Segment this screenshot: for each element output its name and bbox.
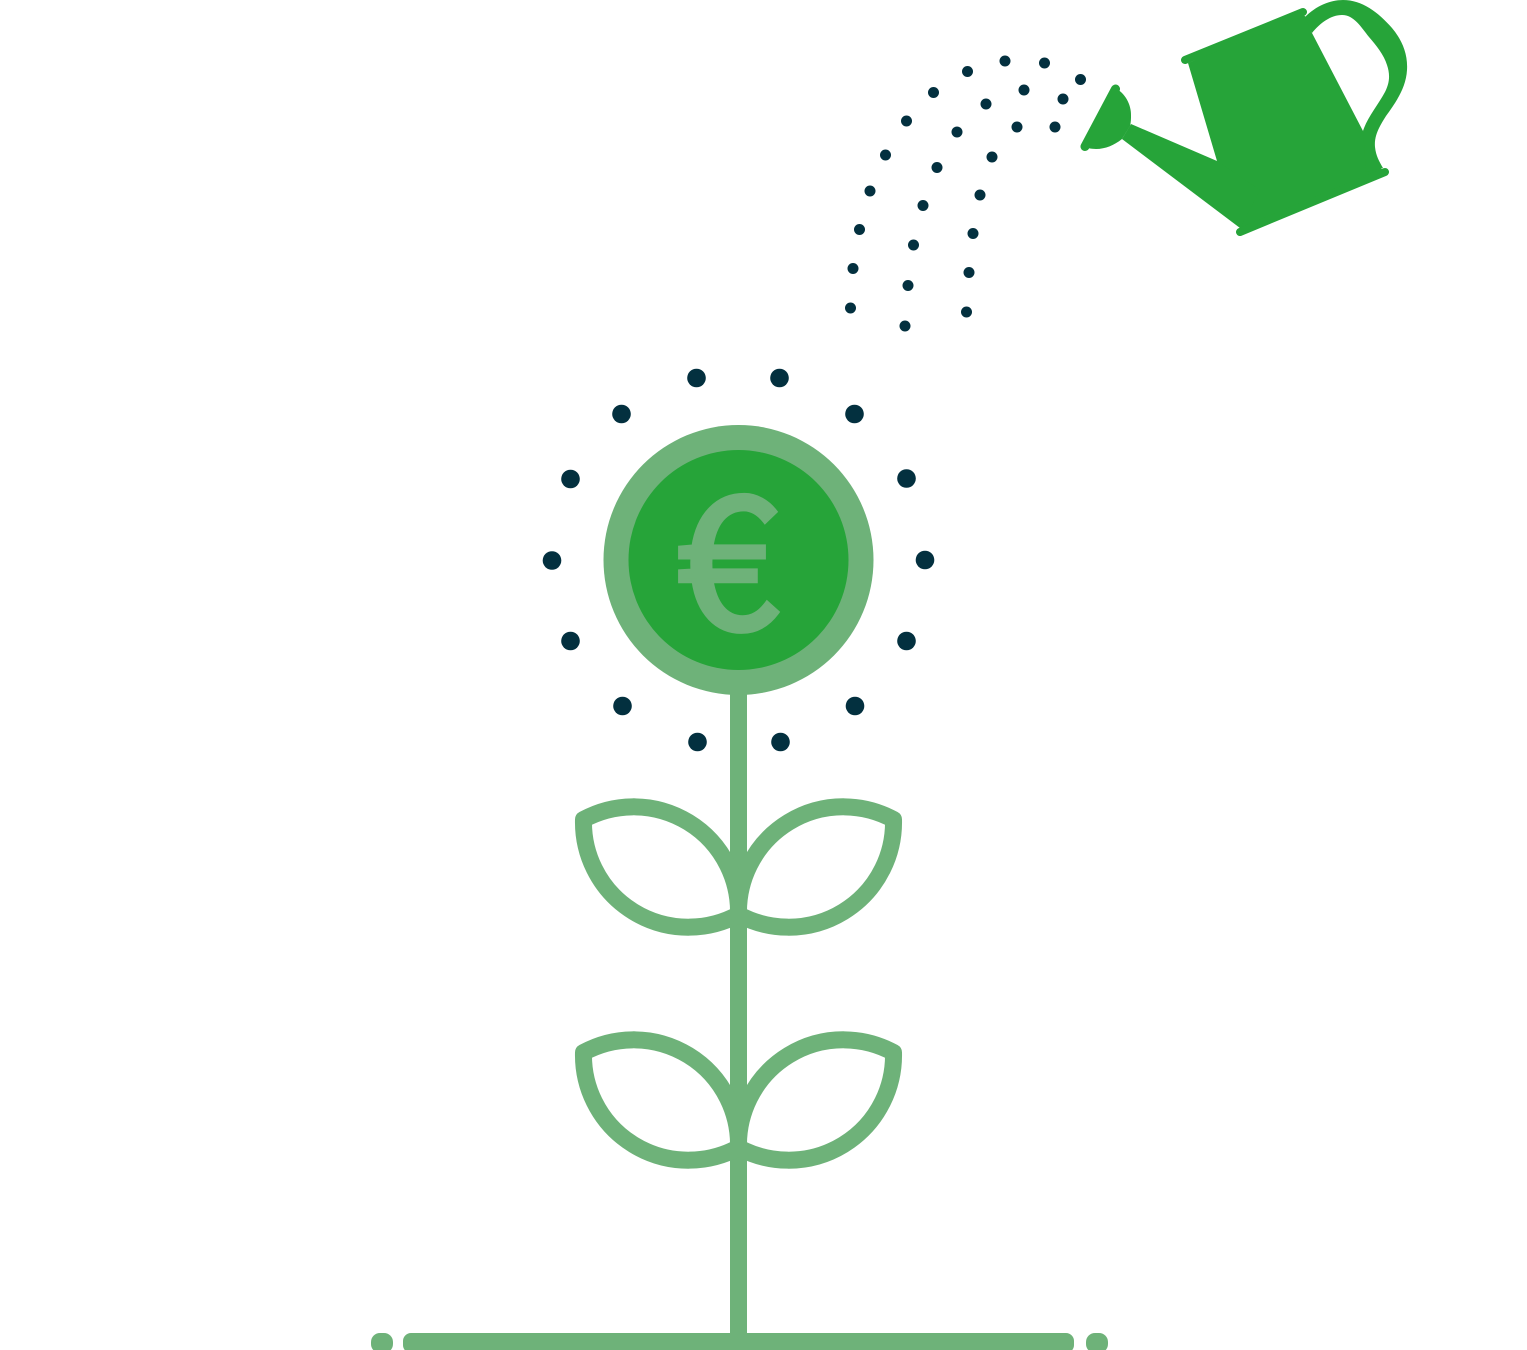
euro symbol: €	[676, 416, 778, 682]
ring of dots around coin	[543, 369, 934, 751]
can body	[1188, 14, 1382, 229]
water droplets	[845, 56, 1086, 332]
can top rim	[1185, 12, 1303, 60]
rose face	[1085, 89, 1116, 146]
can bottom rim	[1240, 172, 1385, 232]
icon: watering can	[1085, 0, 1407, 232]
can rose	[1088, 88, 1131, 149]
coin	[604, 416, 874, 695]
ground line	[371, 1333, 1108, 1350]
can spout	[1122, 124, 1260, 228]
can handle	[1305, 0, 1407, 172]
plant stem	[730, 685, 747, 1335]
lower leaves	[583, 1040, 894, 1160]
upper leaves	[583, 807, 894, 927]
